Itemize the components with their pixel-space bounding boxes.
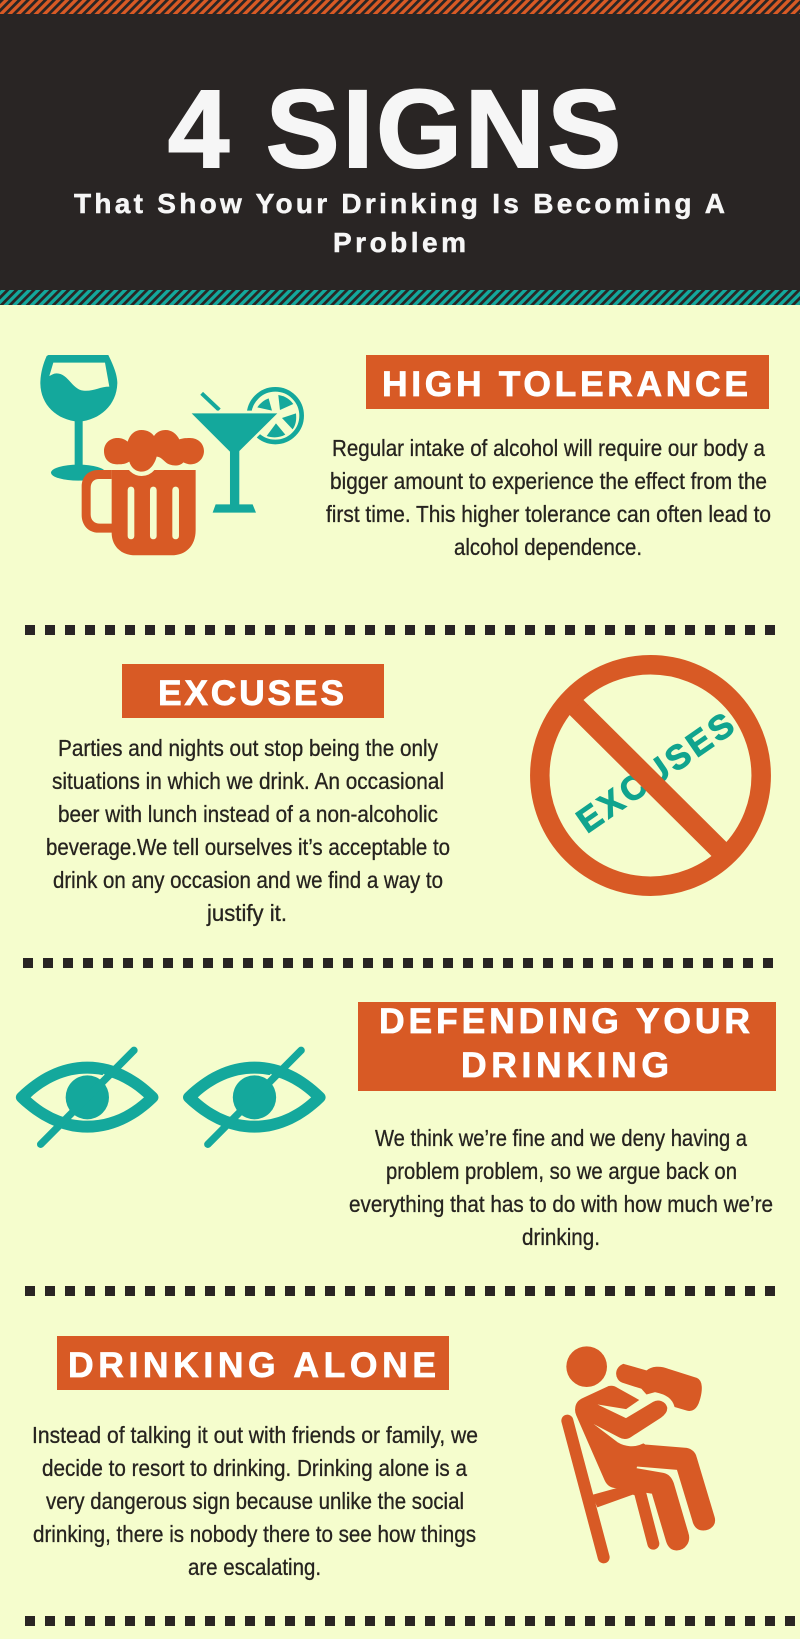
heading: high tolerance: HIGH TOLERANCE <box>382 364 748 404</box>
text: excuses description: beverage.We tell ourselves it’s acceptable to <box>46 834 450 860</box>
text: excuses description: justify it. <box>206 900 287 926</box>
text: defending description: drinking. <box>522 1224 600 1250</box>
icon: no excuses sign <box>540 665 761 886</box>
subtitle: That Show Your Drinking Is Becoming A <box>74 188 725 219</box>
panel: excuses <box>46 664 761 926</box>
heading: defending your drinking: DRINKING <box>461 1045 669 1085</box>
text: excuses description: situations in which we drink. An occasional <box>52 768 444 794</box>
left eye <box>16 1050 158 1144</box>
panel: high tolerance <box>40 355 771 560</box>
bottle <box>617 1364 701 1410</box>
text: defending description: We think we’re fine and we deny having a <box>375 1125 748 1151</box>
body <box>576 1386 715 1550</box>
wine glass <box>40 355 117 481</box>
head <box>566 1346 607 1387</box>
text: drinking alone description: Instead of talking it out with friends or family, we <box>32 1422 478 1448</box>
text: excuses description: Parties and nights out stop being the only <box>58 735 438 761</box>
text: drinking alone description: are escalating. <box>188 1554 321 1580</box>
header banner <box>0 0 800 305</box>
icon: wine glass, beer mug and martini <box>40 355 302 555</box>
martini glass <box>192 393 277 513</box>
icon: no excuses sign: EXCUSES <box>570 706 741 841</box>
subtitle: Problem <box>333 227 466 258</box>
text: high tolerance description: alcohol dependence. <box>454 534 642 560</box>
heading: drinking alone: DRINKING ALONE <box>68 1345 436 1385</box>
text: drinking alone description: drinking, there is nobody there to see how things <box>33 1521 476 1547</box>
heading: drinking alone <box>57 1336 449 1390</box>
text: excuses description: beer with lunch instead of a non-alcoholic <box>58 801 438 827</box>
text: high tolerance description <box>326 435 771 560</box>
panel: defending your drinking <box>16 1001 776 1250</box>
chair <box>567 1421 653 1557</box>
right eye <box>183 1050 326 1144</box>
icon: crossed-out eyes <box>16 1050 326 1144</box>
heading: excuses <box>122 664 384 718</box>
heading: excuses: EXCUSES <box>158 673 344 713</box>
heading: defending your drinking <box>358 1001 776 1091</box>
lime slice <box>249 389 302 442</box>
title: 4 SIGNS <box>168 68 621 191</box>
text: drinking alone description <box>32 1422 478 1580</box>
icon: person drinking alone on a chair <box>566 1346 715 1557</box>
panel: drinking alone <box>32 1336 715 1580</box>
heading: defending your drinking: DEFENDING YOUR <box>379 1001 750 1041</box>
text: excuses description: drink on any occasion and we find a way to <box>53 867 443 893</box>
text: drinking alone description: decide to resort to drinking. Drinking alone is a <box>42 1455 468 1481</box>
subtitle <box>74 188 725 258</box>
beer mug <box>82 430 204 555</box>
heading: high tolerance <box>366 355 769 409</box>
text: defending description <box>349 1125 773 1250</box>
text: defending description: problem problem, so we argue back on <box>386 1158 737 1184</box>
text: drinking alone description: very dangerous sign because unlike the social <box>46 1488 464 1514</box>
text: excuses description <box>46 735 450 926</box>
